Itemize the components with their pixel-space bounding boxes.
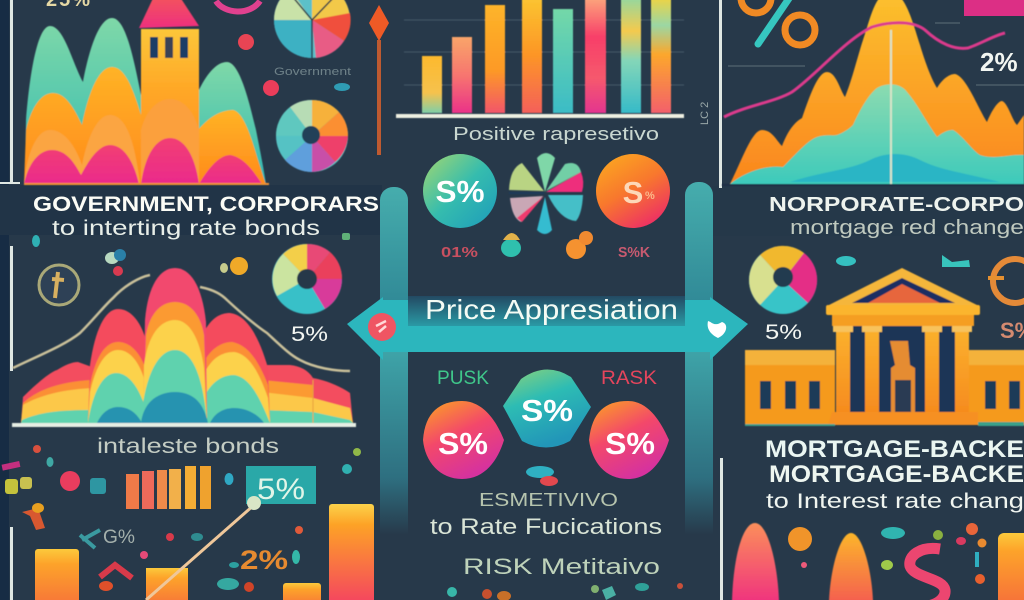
circle: right S — [596, 154, 670, 228]
panel: left bottom bars and confetti — [2, 445, 374, 600]
panel: top right mountains — [722, 0, 1024, 186]
small bar chart — [126, 466, 211, 509]
badge: left S% — [423, 401, 504, 479]
icon: orange ball — [788, 527, 812, 568]
pie chart: top — [274, 0, 351, 58]
label: left 5%: 5% — [291, 323, 328, 346]
badge: right S% — [589, 401, 669, 479]
heading: corporate: NORPORATE-CORPO — [769, 194, 1024, 216]
icon: percent sign rings — [741, 0, 815, 45]
caption: risk meditative: RISK Metitaivo — [463, 554, 660, 579]
label: government small: Government — [274, 66, 351, 78]
shape: peaks — [732, 523, 873, 600]
caption: positive representative: Positive rapresetivo — [453, 124, 659, 144]
icon: bottom center confetti — [447, 583, 683, 600]
label: risk red: RASK — [601, 368, 657, 389]
icon: tower — [139, 0, 199, 184]
badge: center S% — [503, 369, 591, 448]
icon: confetti — [2, 445, 361, 592]
icon: small blobs — [501, 231, 593, 259]
grid lines right — [728, 23, 1024, 85]
icon: petal pinwheel — [509, 153, 583, 234]
panel: rainbow area chart — [12, 268, 356, 427]
badge: left S%: S% — [438, 426, 488, 461]
label: small right: S%K — [618, 244, 650, 261]
pie chart: middle — [276, 100, 348, 172]
heading: government corporate: GOVERNMENT, CORPORARS — [33, 193, 379, 216]
icon: pink ring — [216, 1, 260, 12]
right hump — [205, 313, 270, 423]
icon: confetti left — [32, 233, 350, 276]
line: trend — [724, 23, 1005, 117]
label: 2% orange: 2% — [240, 545, 288, 575]
tall bars — [35, 504, 374, 600]
panel: government bonds chart — [24, 0, 269, 185]
heading: price appresiation: Price Appresiation — [425, 294, 678, 325]
label: interest bonds: intaleste bonds — [97, 435, 279, 458]
icon: small center blobs — [526, 466, 558, 486]
icon: small marks — [881, 523, 986, 584]
panel: side rails — [0, 0, 723, 600]
icon: small teal marks — [836, 255, 970, 267]
panel: top center bar chart — [396, 0, 684, 118]
heading: mortgage-backed line 2: MORTGAGE-BACKE — [769, 461, 1024, 488]
chart: layered mountains — [24, 18, 266, 184]
subheading: interest rate bonds: to interting rate bonds — [52, 217, 320, 240]
heading: mortgage-backed line 1: MORTGAGE-BACKE — [765, 436, 1024, 463]
icon: ring right — [988, 259, 1024, 303]
label: 2%: 2% — [980, 47, 1018, 77]
badge: 5% — [246, 466, 316, 506]
label: vertical small: LC 2 — [699, 102, 711, 125]
line: rising — [146, 496, 261, 600]
panel: bottom right peaks — [732, 523, 1024, 600]
circle: right S: % — [645, 190, 655, 202]
label: risk green: PUSK — [437, 368, 489, 389]
badge: 5%: 5% — [257, 473, 305, 506]
label: right 5%: 5% — [765, 321, 802, 344]
badge: right S%: S% — [605, 426, 655, 461]
right blocks — [262, 365, 353, 423]
bar: right corner — [998, 533, 1024, 600]
circle: left S%: S% — [436, 174, 484, 209]
panel: right middle — [745, 246, 1024, 513]
caption: rate fluctuations: to Rate Fucications — [430, 514, 662, 539]
chart: area mountains — [722, 0, 1024, 186]
banner arrow: price appreciation — [347, 294, 748, 360]
circle: left S% — [423, 154, 497, 228]
icon: dollar S — [910, 548, 945, 600]
left hump — [88, 309, 146, 423]
center hump — [141, 268, 208, 423]
pie chart: right — [749, 246, 817, 314]
subheading: to interest rate changes: to Interest rate chang — [766, 490, 1024, 513]
icon: pink square corner — [964, 0, 1024, 16]
circle: right S: S — [623, 175, 643, 210]
pie chart: left lower — [272, 244, 342, 314]
icon: orange marker — [369, 5, 389, 155]
badge: center S%: S% — [521, 393, 573, 428]
left block — [21, 362, 92, 423]
caption: sensitive: ESMETIVIVO — [479, 490, 618, 510]
subheading: mortgage rate change: mortgage red change — [790, 217, 1024, 239]
label: small left: 01% — [441, 244, 478, 261]
icon: round emblem — [39, 265, 79, 305]
icon: red dots — [238, 34, 350, 96]
icon: classical building — [745, 268, 1024, 426]
line: bell curve — [13, 275, 350, 371]
label: 6%: G% — [103, 527, 135, 548]
